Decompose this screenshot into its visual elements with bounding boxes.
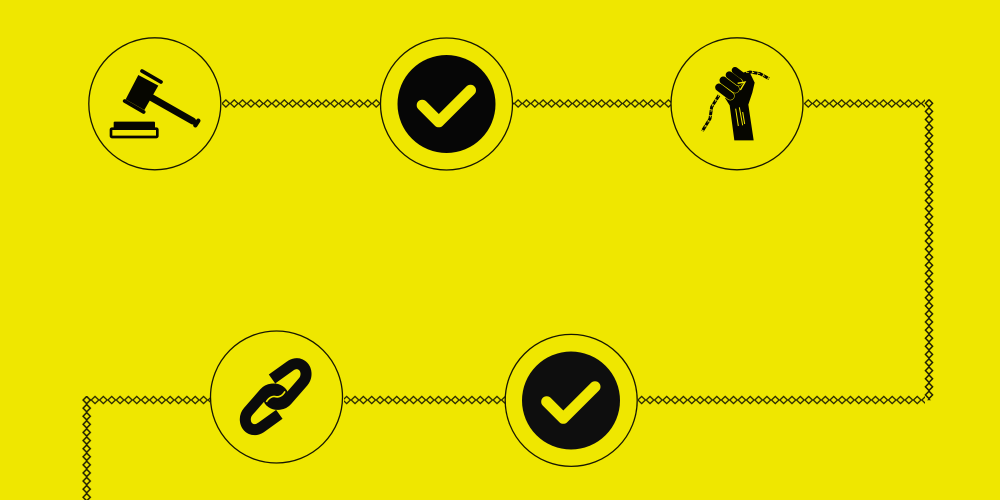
icon: check badge [398, 55, 496, 153]
step 2: check mark [380, 38, 512, 170]
icon: gavel [111, 71, 198, 137]
icon: chain links [245, 364, 306, 430]
icon: check badge [522, 352, 620, 450]
chain connector path [82, 99, 933, 500]
step 3: raised fist breaking chain [671, 38, 803, 170]
step 4: chain link [210, 331, 342, 463]
icon: fist with broken chain [702, 70, 769, 140]
step 5: check mark [505, 334, 637, 466]
step 1: gavel [89, 38, 221, 170]
